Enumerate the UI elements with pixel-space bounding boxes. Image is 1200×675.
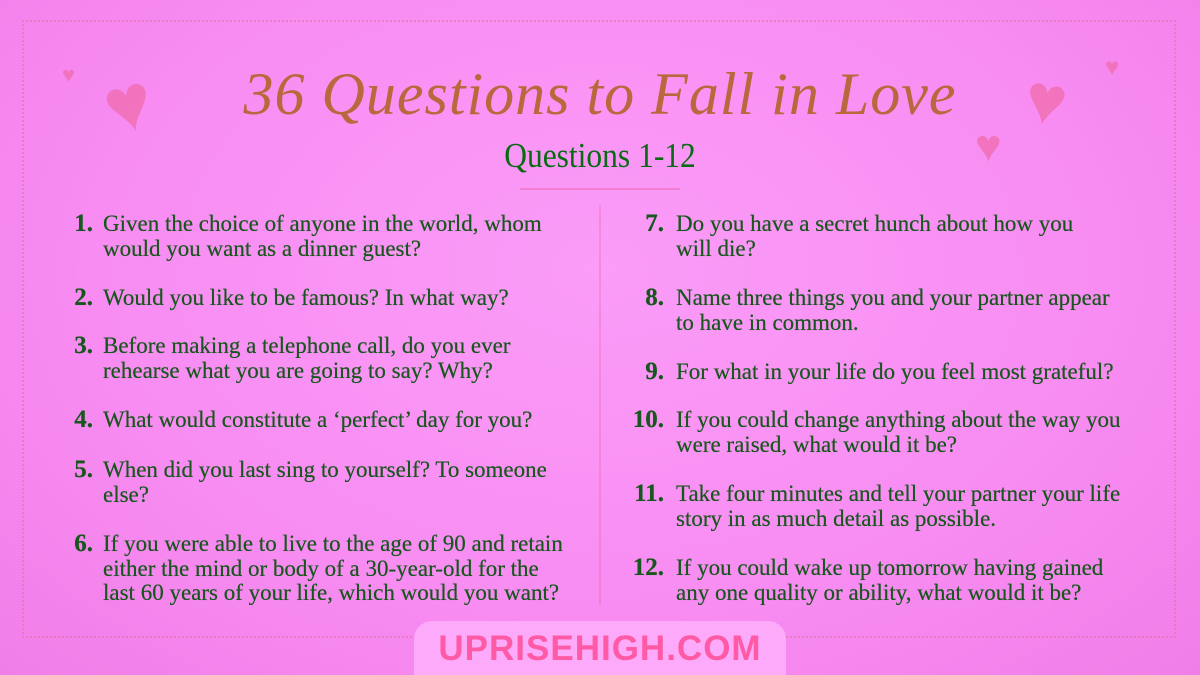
footer badge: UPRISEHIGH.COM — [438, 629, 762, 668]
text: to have in common. — [676, 310, 859, 334]
left column questions — [74, 210, 563, 606]
text: If you could change anything about the way you — [676, 407, 1121, 432]
text: 12. — [633, 554, 664, 581]
text: story in as much detail as possible. — [676, 506, 996, 530]
text: If you were able to live to the age of 90 and retain — [103, 531, 563, 556]
decorative hearts: ♥ — [94, 56, 163, 154]
text: 3. — [74, 332, 93, 359]
text: ♥ — [975, 121, 1002, 171]
text: were raised, what would it be? — [676, 432, 957, 456]
text: Take four minutes and tell your partner your life — [676, 481, 1120, 506]
text: Given the choice of anyone in the world, whom — [103, 211, 542, 236]
text: 1. — [74, 210, 93, 237]
text: 11. — [634, 480, 664, 507]
text: either the mind or body of a 30-year-old for the — [103, 556, 539, 580]
text: 10. — [633, 406, 664, 433]
text: any one quality or ability, what would it be? — [676, 580, 1081, 604]
footer badge — [414, 621, 786, 675]
title: 36 Questions to Fall in Love — [244, 61, 956, 127]
text: Before making a telephone call, do you ever — [103, 333, 510, 358]
text: 8. — [645, 284, 664, 311]
text: rehearse what you are going to say? Why? — [103, 358, 493, 382]
subtitle: Questions 1-12 — [504, 136, 696, 175]
divider — [520, 188, 680, 190]
text: 6. — [74, 530, 93, 557]
text: Name three things you and your partner appear — [676, 285, 1110, 310]
text: ♥ — [62, 62, 75, 87]
text: For what in your life do you feel most grateful? — [676, 359, 1114, 384]
text: else? — [103, 482, 149, 506]
text: ♥ — [1105, 55, 1119, 81]
text: Would you like to be famous? In what way? — [103, 285, 509, 310]
text: 2. — [74, 284, 93, 311]
text: If you could wake up tomorrow having gained — [676, 555, 1103, 580]
text: ♥ — [1019, 60, 1073, 143]
text: 9. — [645, 358, 664, 385]
text: When did you last sing to yourself? To someone — [103, 457, 547, 482]
text: will die? — [676, 236, 756, 260]
text: 4. — [74, 406, 93, 433]
text: last 60 years of your life, which would you want? — [103, 580, 559, 605]
text: What would constitute a ‘perfect’ day for you? — [103, 407, 532, 432]
text: 7. — [645, 210, 664, 237]
right column questions — [633, 210, 1121, 606]
text: would you want as a dinner guest? — [103, 236, 421, 260]
text: Do you have a secret hunch about how you — [676, 211, 1073, 236]
text: 5. — [74, 456, 93, 483]
